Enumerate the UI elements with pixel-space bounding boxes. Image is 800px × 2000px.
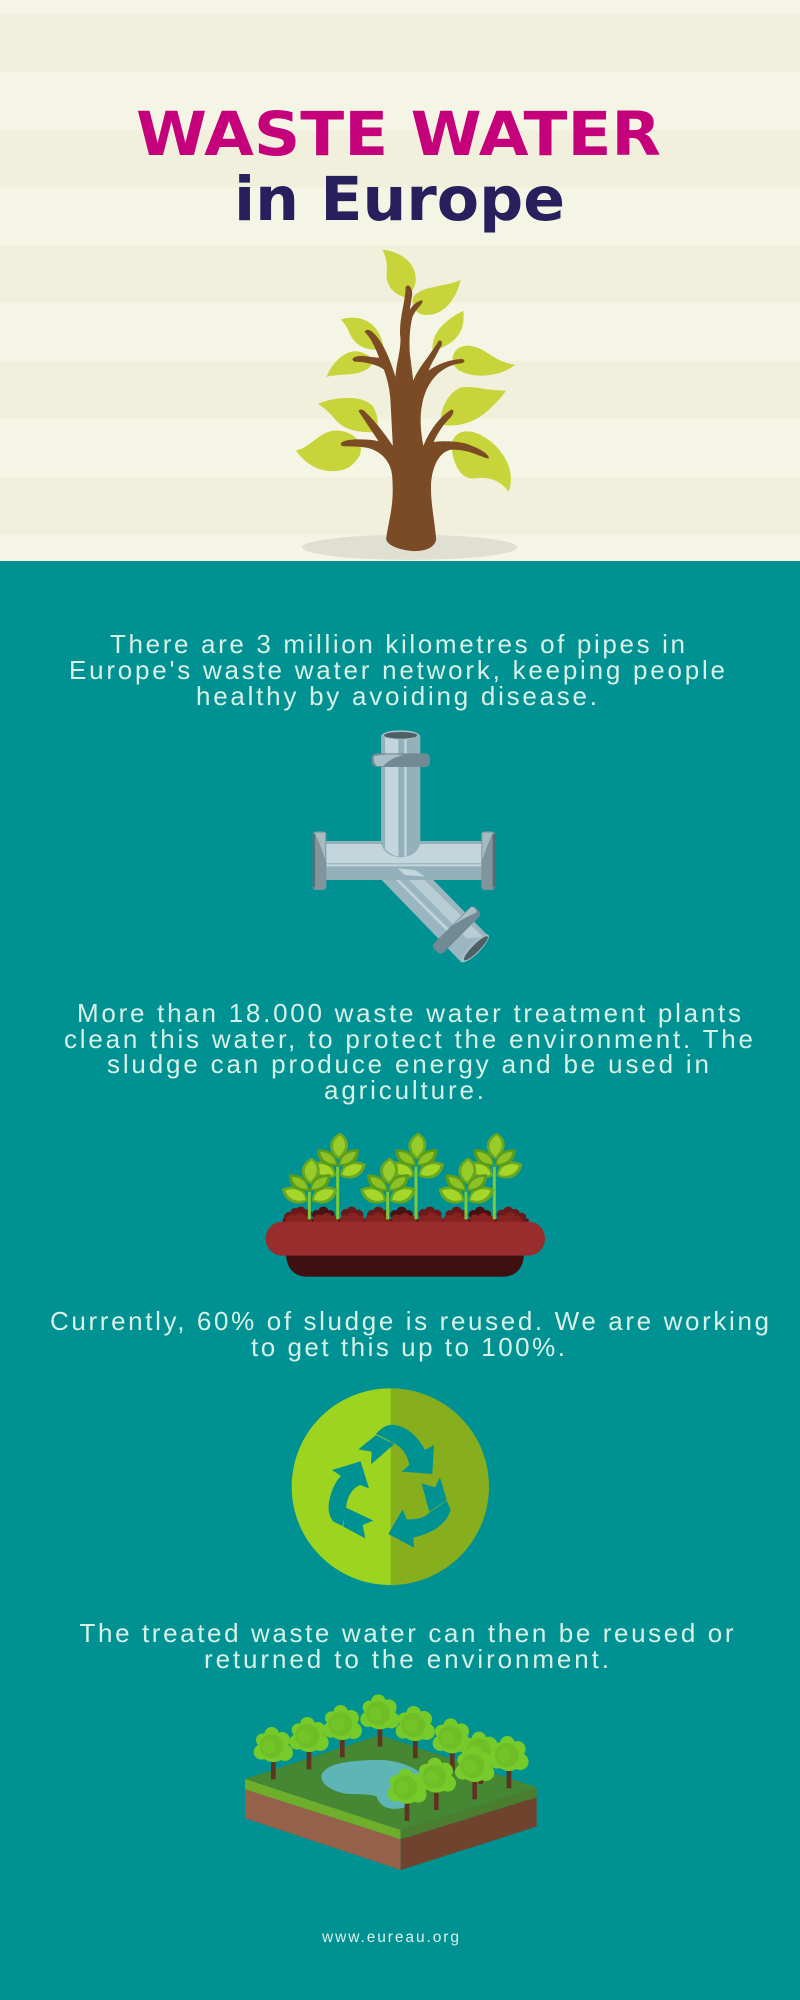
icon: tree <box>296 250 517 560</box>
title: WASTE WATER <box>136 100 661 170</box>
text block: treated water: returned to the environment. <box>204 1644 609 1674</box>
text block: pipes: There are 3 million kilometres of pipes in <box>110 629 685 659</box>
text block: treatment plants: agriculture. <box>324 1075 484 1105</box>
text block: pipes: healthy by avoiding disease. <box>196 681 597 711</box>
text block: sludge reuse: to get this up to 100%. <box>251 1332 565 1362</box>
icon: land block with lake and trees <box>245 1694 537 1870</box>
text block: treated water: The treated waste water can then be reused or <box>80 1618 734 1648</box>
panel: teal body background <box>0 561 800 2000</box>
text block: pipes <box>69 629 725 711</box>
text block: treatment plants <box>64 998 753 1105</box>
title <box>136 100 661 235</box>
text block: pipes: Europe's waste water network, keeping people <box>69 655 725 685</box>
text block: treated water <box>80 1618 734 1674</box>
icon: planter with seedlings <box>266 1133 545 1277</box>
icon: pipes <box>313 730 495 966</box>
icon: recycling badge <box>292 1388 489 1585</box>
text block: sludge reuse <box>50 1306 769 1362</box>
panel: header background <box>0 0 800 561</box>
text block: sludge reuse: Currently, 60% of sludge is reused. We are working <box>50 1306 769 1336</box>
text block: treatment plants: More than 18.000 waste water treatment plants <box>77 998 741 1028</box>
text block: treatment plants: clean this water, to protect the environment. The <box>64 1024 753 1054</box>
title: in Europe <box>234 165 565 235</box>
footer url: www.eureau.org <box>321 1929 459 1946</box>
text block: treatment plants: sludge can produce energy and be used in <box>107 1049 709 1079</box>
